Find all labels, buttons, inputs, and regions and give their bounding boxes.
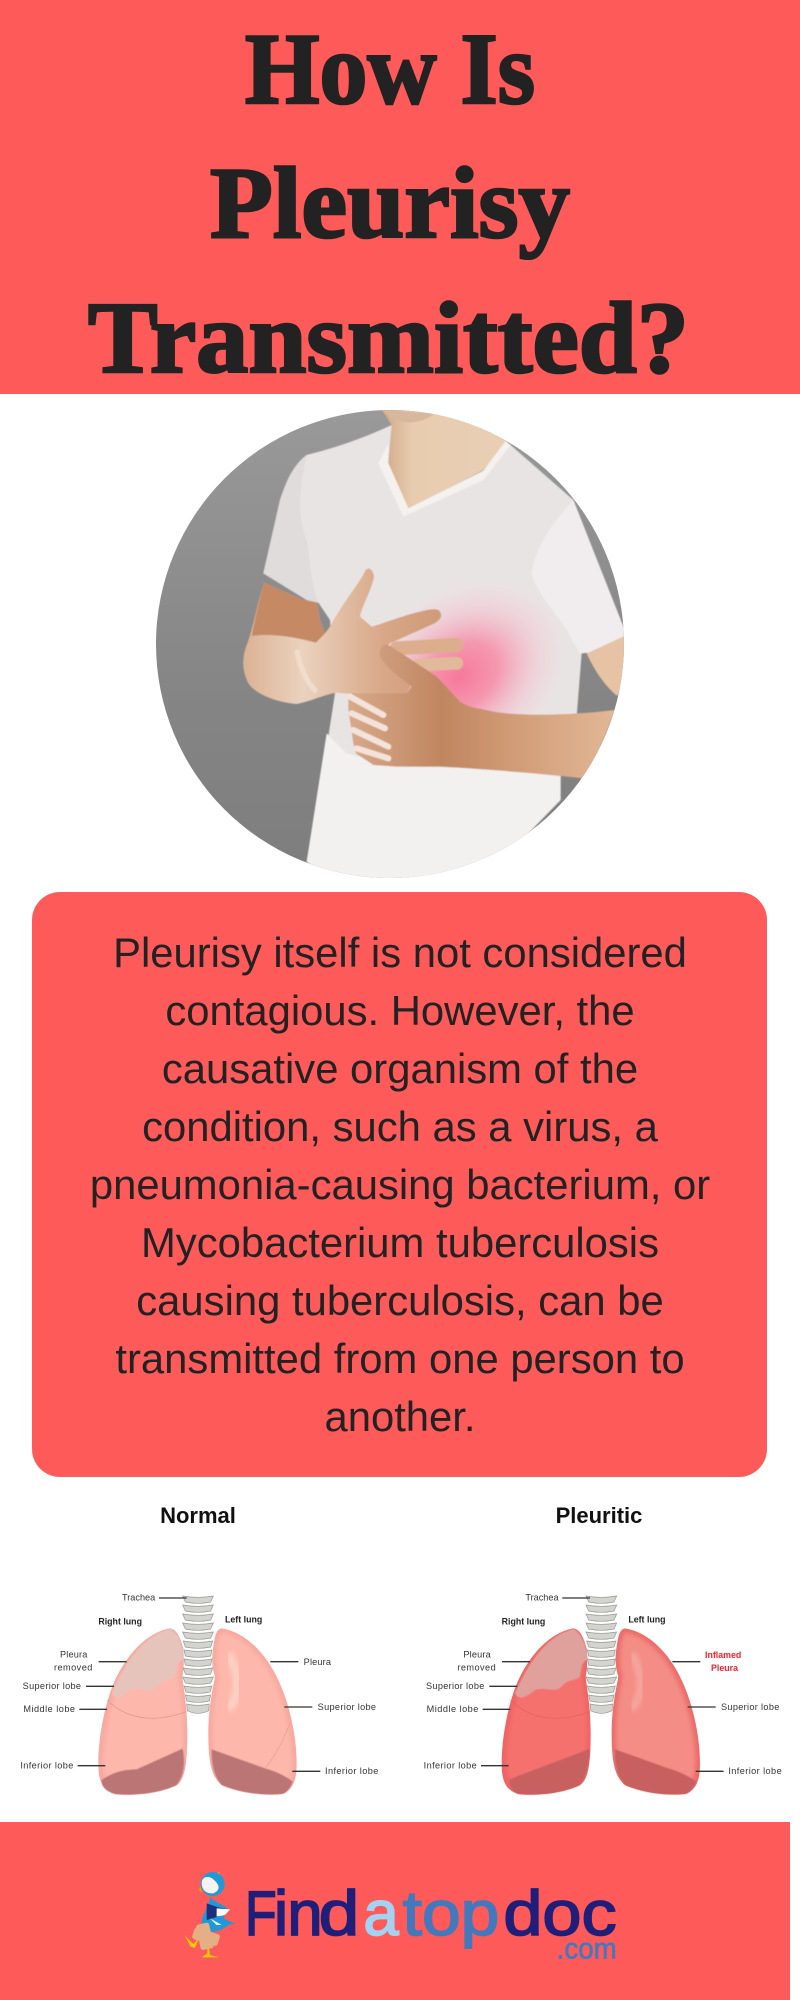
chin shadow <box>382 410 435 422</box>
upper arm shadow <box>252 583 325 643</box>
diagram: normal lungs <box>20 1593 378 1795</box>
t-shirt <box>300 424 586 778</box>
heading: Normal: Normal <box>160 1503 236 1528</box>
wordmark: doc <box>503 1879 617 1949</box>
labels: removed <box>54 1662 92 1672</box>
wordmark <box>245 1879 617 1965</box>
labels <box>20 1593 378 1776</box>
wordmark: d <box>319 1879 359 1949</box>
wordmark: a <box>363 1879 399 1949</box>
body text: causing tuberculosis, can be <box>136 1277 664 1324</box>
labels: Inferior lobe <box>424 1761 477 1771</box>
body text: Pleurisy itself is not considered <box>113 929 687 976</box>
labels: Superior lobe <box>318 1702 376 1712</box>
left sleeve shade <box>263 455 318 603</box>
lower forearm and hand <box>348 645 615 778</box>
right lung <box>98 1628 187 1795</box>
body text: transmitted from one person to <box>115 1335 685 1382</box>
title: How Is <box>245 13 535 126</box>
ring finger <box>418 663 457 665</box>
labels: Pleura <box>304 1657 332 1667</box>
icon: bird mascot <box>184 1872 236 1957</box>
left lung <box>208 1628 297 1794</box>
body text: condition, such as a virus, a <box>142 1103 659 1150</box>
labels: Trachea <box>525 1593 559 1603</box>
pain glow <box>398 596 548 714</box>
labels: Pleura <box>60 1649 88 1659</box>
trachea <box>586 1596 617 1713</box>
wordmark: n <box>287 1879 323 1949</box>
shirt lower highlight <box>307 733 561 890</box>
diagram: pleuritic lungs <box>424 1593 782 1795</box>
photo: man holding chest <box>156 410 624 878</box>
labels: Trachea <box>122 1593 156 1603</box>
labels: Inflamed <box>705 1650 741 1660</box>
labels: Superior lobe <box>426 1681 484 1691</box>
body text: Mycobacterium tuberculosis <box>141 1219 659 1266</box>
wordmark: F <box>245 1879 277 1949</box>
heading: Pleuritic: Pleuritic <box>556 1503 642 1528</box>
upper arm, forearm and hand <box>243 569 441 704</box>
labels: Middle lobe <box>23 1704 75 1714</box>
labels: Left lung <box>225 1615 262 1625</box>
knuckle highlights <box>350 697 388 758</box>
sleeve <box>532 500 627 653</box>
body text: causative organism of the <box>162 1045 638 1092</box>
wordmark: i <box>274 1879 288 1949</box>
labels: Inferior lobe <box>325 1766 378 1776</box>
labels: Right lung <box>502 1617 545 1627</box>
labels: Right lung <box>98 1617 142 1627</box>
body text <box>90 929 710 1440</box>
middle finger <box>397 645 457 648</box>
neck skin <box>380 407 510 510</box>
body text: another. <box>324 1393 476 1440</box>
labels <box>424 1593 782 1776</box>
right lung <box>502 1628 591 1795</box>
icon: bandage <box>191 1922 221 1950</box>
body text: pneumonia-causing bacterium, or <box>90 1161 710 1208</box>
labels: Pleura <box>463 1649 492 1659</box>
labels: Inferior lobe <box>728 1766 782 1776</box>
collar <box>378 441 511 517</box>
labels: Middle lobe <box>427 1704 478 1714</box>
right arm behind <box>587 633 627 696</box>
labels: Superior lobe <box>23 1681 81 1691</box>
labels: removed <box>457 1662 496 1672</box>
trachea <box>183 1596 213 1713</box>
wordmark: top <box>403 1879 499 1949</box>
title banner <box>0 0 800 395</box>
left lung <box>612 1628 700 1794</box>
labels: Left lung <box>628 1615 666 1625</box>
labels: Pleura <box>711 1663 738 1673</box>
labels: Superior lobe <box>721 1702 779 1712</box>
text panel <box>32 892 767 1477</box>
wordmark: .com <box>557 1932 617 1965</box>
logo <box>184 1872 617 1965</box>
title: Pleurisy <box>210 147 570 260</box>
forearm veins <box>297 650 317 692</box>
labels: Inferior lobe <box>20 1761 73 1771</box>
title <box>88 13 689 395</box>
title: Transmitted? <box>88 282 689 395</box>
body text: contagious. However, the <box>165 987 635 1034</box>
footer band <box>0 1822 790 2000</box>
